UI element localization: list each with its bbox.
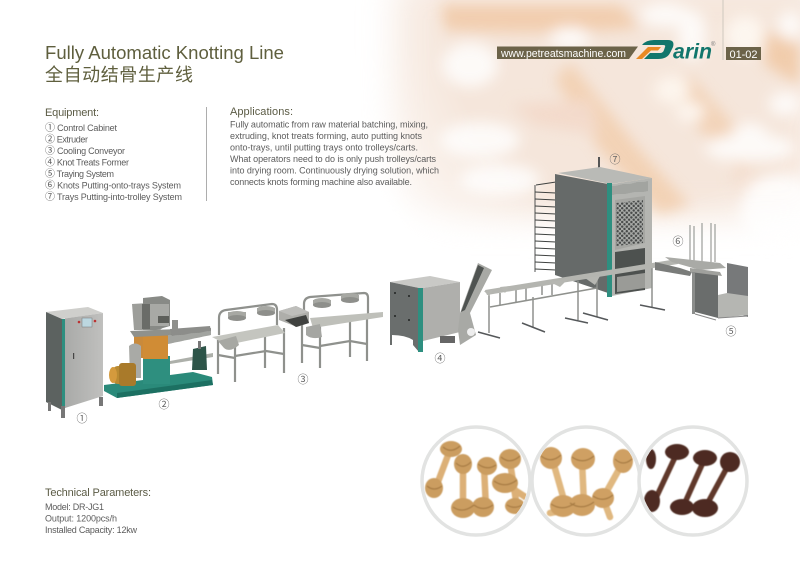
equipment list: ③ Cooling Conveyor [45, 145, 125, 157]
applications text: connects knots forming machine also available. [230, 177, 412, 187]
applications text [230, 106, 439, 187]
website banner: www.petreatsmachine.com [500, 48, 626, 60]
machine 4: knot treats former [390, 276, 460, 352]
frame 1 [218, 328, 284, 382]
logo: Darin: ® [711, 41, 716, 48]
equipment list: Equipment: [45, 107, 99, 119]
applications text: Applications: [230, 106, 293, 118]
frame 2 [302, 317, 367, 368]
applications text: onto-trays, until putting trays onto trolleys/carts. [230, 142, 418, 152]
callout numbers: ④ [434, 352, 446, 365]
motor [109, 363, 136, 386]
equipment list [45, 107, 182, 203]
product circle 3: dark knots [639, 427, 747, 535]
conveyor belts [212, 325, 285, 345]
callout numbers: ⑤ [726, 325, 736, 338]
former head [279, 306, 309, 327]
equipment list: ⑦ Trays Putting-into-trolley System [45, 191, 182, 203]
machine 6: trays putting system [655, 223, 726, 276]
technical parameters: Technical Parameters: [45, 487, 151, 499]
logo: Darin: arin [673, 40, 712, 64]
machine 4: inclined chute and long conveyor [458, 259, 678, 345]
extruder barrel [168, 328, 211, 344]
vertical divider [206, 107, 208, 201]
support bar [170, 353, 213, 364]
trolley rack [535, 182, 556, 272]
machine 2: extruder [104, 296, 213, 398]
background: blurred food photo [390, 0, 800, 245]
page number [726, 47, 761, 61]
machine 5: traying system [690, 263, 748, 320]
orange column [134, 334, 168, 358]
callout numbers: ③ [298, 373, 308, 386]
machine 1: control cabinet [46, 307, 103, 418]
top plate [130, 329, 178, 337]
extruder base [104, 372, 213, 398]
equipment list: ② Extruder [45, 134, 88, 146]
callout numbers: ⑦ [610, 153, 620, 166]
machine 3: cooling conveyor [212, 293, 383, 382]
end rollers [218, 336, 239, 350]
hopper [132, 302, 165, 330]
product circle 2: light knots [532, 427, 640, 535]
equipment list: ① Control Cabinet [45, 122, 117, 134]
callout numbers [76, 153, 736, 425]
applications text: Fully automatic from raw material batching, mixing, [230, 120, 428, 130]
callout numbers: ② [158, 398, 170, 411]
belt cover [129, 344, 141, 378]
product circle 1: light knots [422, 427, 530, 535]
equipment list: ⑤ Traying System [45, 168, 114, 180]
applications text: into drying room. Continuously drying solution, which [230, 166, 439, 176]
cutter [192, 346, 207, 370]
technical parameters: Output: 1200pcs/h [45, 514, 117, 524]
technical parameters [45, 487, 151, 535]
title: 全自动结骨生产线 [45, 65, 193, 85]
overhead fans [228, 293, 359, 321]
applications text: What operators need to do is only push trolleys/carts [230, 154, 436, 164]
equipment list: ④ Knot Treats Former [45, 156, 129, 168]
logo: Darin [636, 40, 716, 64]
technical parameters: Model: DR-JG1 [45, 502, 104, 512]
page number: 01-02 [730, 49, 758, 61]
callout numbers: ⑥ [672, 235, 684, 248]
technical parameters: Installed Capacity: 12kw [45, 525, 138, 535]
page corner divider line [722, 0, 724, 60]
title [45, 43, 284, 85]
title: Fully Automatic Knotting Line [45, 43, 284, 63]
website bar and logo [497, 40, 716, 64]
applications text: extruding, knot treats forming, auto putting knots [230, 131, 422, 141]
machine 7: trays putting-into-trolley [535, 157, 652, 297]
callout numbers: ① [76, 412, 88, 425]
equipment list: ⑥ Knots Putting-onto-trays System [45, 180, 181, 192]
